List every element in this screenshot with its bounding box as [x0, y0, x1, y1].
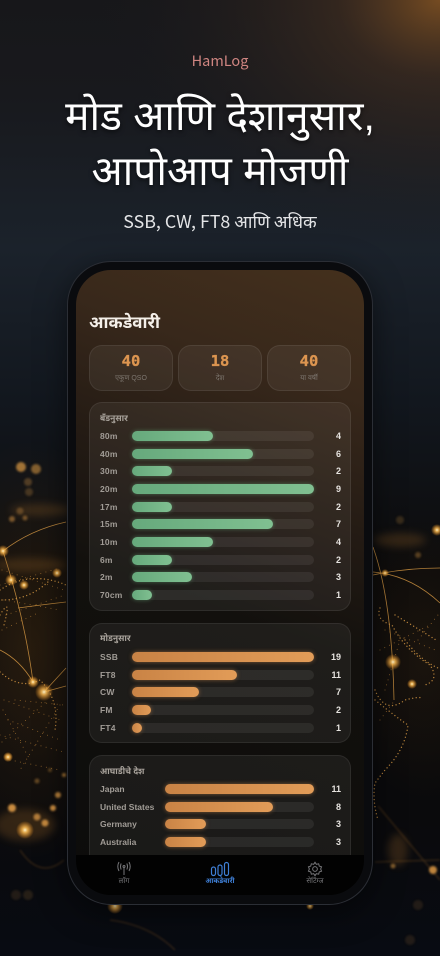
- bar chart: top countries: [100, 781, 341, 850]
- heading: by band: बँडनुसार: [100, 413, 128, 423]
- row United States: 8: [336, 802, 341, 812]
- row 40m: 6: [336, 449, 341, 459]
- row SSB: SSB: [100, 652, 118, 662]
- row 80m: [100, 428, 341, 444]
- heading: by mode: मोडनुसार: [100, 633, 131, 643]
- row FM: [100, 702, 341, 718]
- row Germany: [100, 816, 341, 832]
- row 2m: 2m: [100, 572, 113, 582]
- row 6m: 6m: [100, 555, 113, 565]
- row 17m: [100, 500, 341, 514]
- row FT4: 1: [336, 723, 341, 733]
- row 70cm: [100, 588, 341, 602]
- row Germany: Germany: [100, 819, 137, 829]
- screen title: आकडेवारी: [89, 313, 160, 332]
- main heading: मोड आणि देशानुसार,: [65, 93, 375, 139]
- row CW: 7: [336, 687, 341, 697]
- phone screen background: [76, 270, 364, 895]
- row FM: 2: [336, 705, 341, 715]
- row 15m: [100, 516, 341, 532]
- row CW: CW: [100, 687, 115, 697]
- row Japan: 11: [331, 784, 341, 794]
- row Australia: Australia: [100, 837, 136, 847]
- row FM: FM: [100, 705, 113, 715]
- row 10m: 10m: [100, 537, 118, 547]
- row 15m: 15m: [100, 519, 118, 529]
- main heading: आपोआप मोजणी: [92, 148, 348, 194]
- row FT8: 11: [331, 670, 341, 680]
- row 2m: [100, 570, 341, 584]
- row 80m: 80m: [100, 431, 118, 441]
- subtitle: SSB, CW, FT8 आणि अधिक: [123, 208, 317, 234]
- icon: statistics tab: [210, 862, 230, 876]
- caption: या वर्षी: [300, 375, 318, 382]
- row 20m: 9: [336, 484, 341, 494]
- row 70cm: 1: [336, 590, 341, 600]
- row 17m: 17m: [100, 502, 118, 512]
- row 6m: 2: [336, 555, 341, 565]
- icon: settings gear tab: [308, 862, 322, 876]
- row SSB: 19: [331, 652, 341, 662]
- row 15m: 7: [336, 519, 341, 529]
- stat card: this year: [267, 345, 351, 391]
- row Germany: 3: [336, 819, 341, 829]
- row 30m: [100, 464, 341, 478]
- row Japan: [100, 781, 341, 797]
- row SSB: [100, 649, 341, 665]
- row 10m: [100, 534, 341, 550]
- panel: by mode: [89, 623, 351, 743]
- row 30m: 2: [336, 466, 341, 476]
- row 70cm: 70cm: [100, 590, 123, 600]
- row CW: [100, 684, 341, 700]
- row 30m: 30m: [100, 466, 118, 476]
- value: 40: [300, 352, 318, 370]
- row 17m: 2: [336, 502, 341, 512]
- value: 18: [211, 352, 229, 370]
- row 10m: 4: [336, 537, 341, 547]
- panel: top countries: [89, 755, 351, 855]
- row FT8: FT8: [100, 670, 116, 680]
- caption: एकूण QSO: [115, 375, 147, 382]
- row Japan: Japan: [100, 784, 125, 794]
- icon: antenna tab: [117, 862, 131, 875]
- caption: देश: [216, 375, 224, 382]
- stat card: total QSO: [89, 345, 173, 391]
- row 20m: [100, 482, 341, 496]
- value: 40: [122, 352, 140, 370]
- main heading: [65, 93, 375, 733]
- row 2m: 3: [336, 572, 341, 582]
- row FT4: [100, 720, 341, 736]
- row United States: [100, 799, 341, 815]
- row Australia: [100, 834, 341, 850]
- bar chart: by band: [100, 428, 341, 602]
- row FT8: [100, 667, 341, 683]
- heading: top countries: आघाडीचे देश: [100, 766, 144, 776]
- row 6m: [100, 552, 341, 568]
- phone frame: [67, 261, 373, 905]
- panel: by band: [89, 402, 351, 611]
- tab label: log: लॉग: [119, 878, 129, 885]
- row FT4: FT4: [100, 723, 116, 733]
- brand name: HamLog: [192, 50, 248, 71]
- tab label: statistics: आकडेवारी: [205, 878, 235, 885]
- bar chart: by mode: [100, 649, 341, 736]
- row United States: United States: [100, 802, 154, 812]
- row 40m: 40m: [100, 449, 118, 459]
- row 20m: 20m: [100, 484, 118, 494]
- row 40m: [100, 446, 341, 462]
- row Australia: 3: [336, 837, 341, 847]
- row 80m: 4: [336, 431, 341, 441]
- tab label: settings: सेटिंग्ज: [306, 878, 324, 885]
- stat card: countries: [178, 345, 262, 391]
- bottom tab bar: [76, 855, 364, 895]
